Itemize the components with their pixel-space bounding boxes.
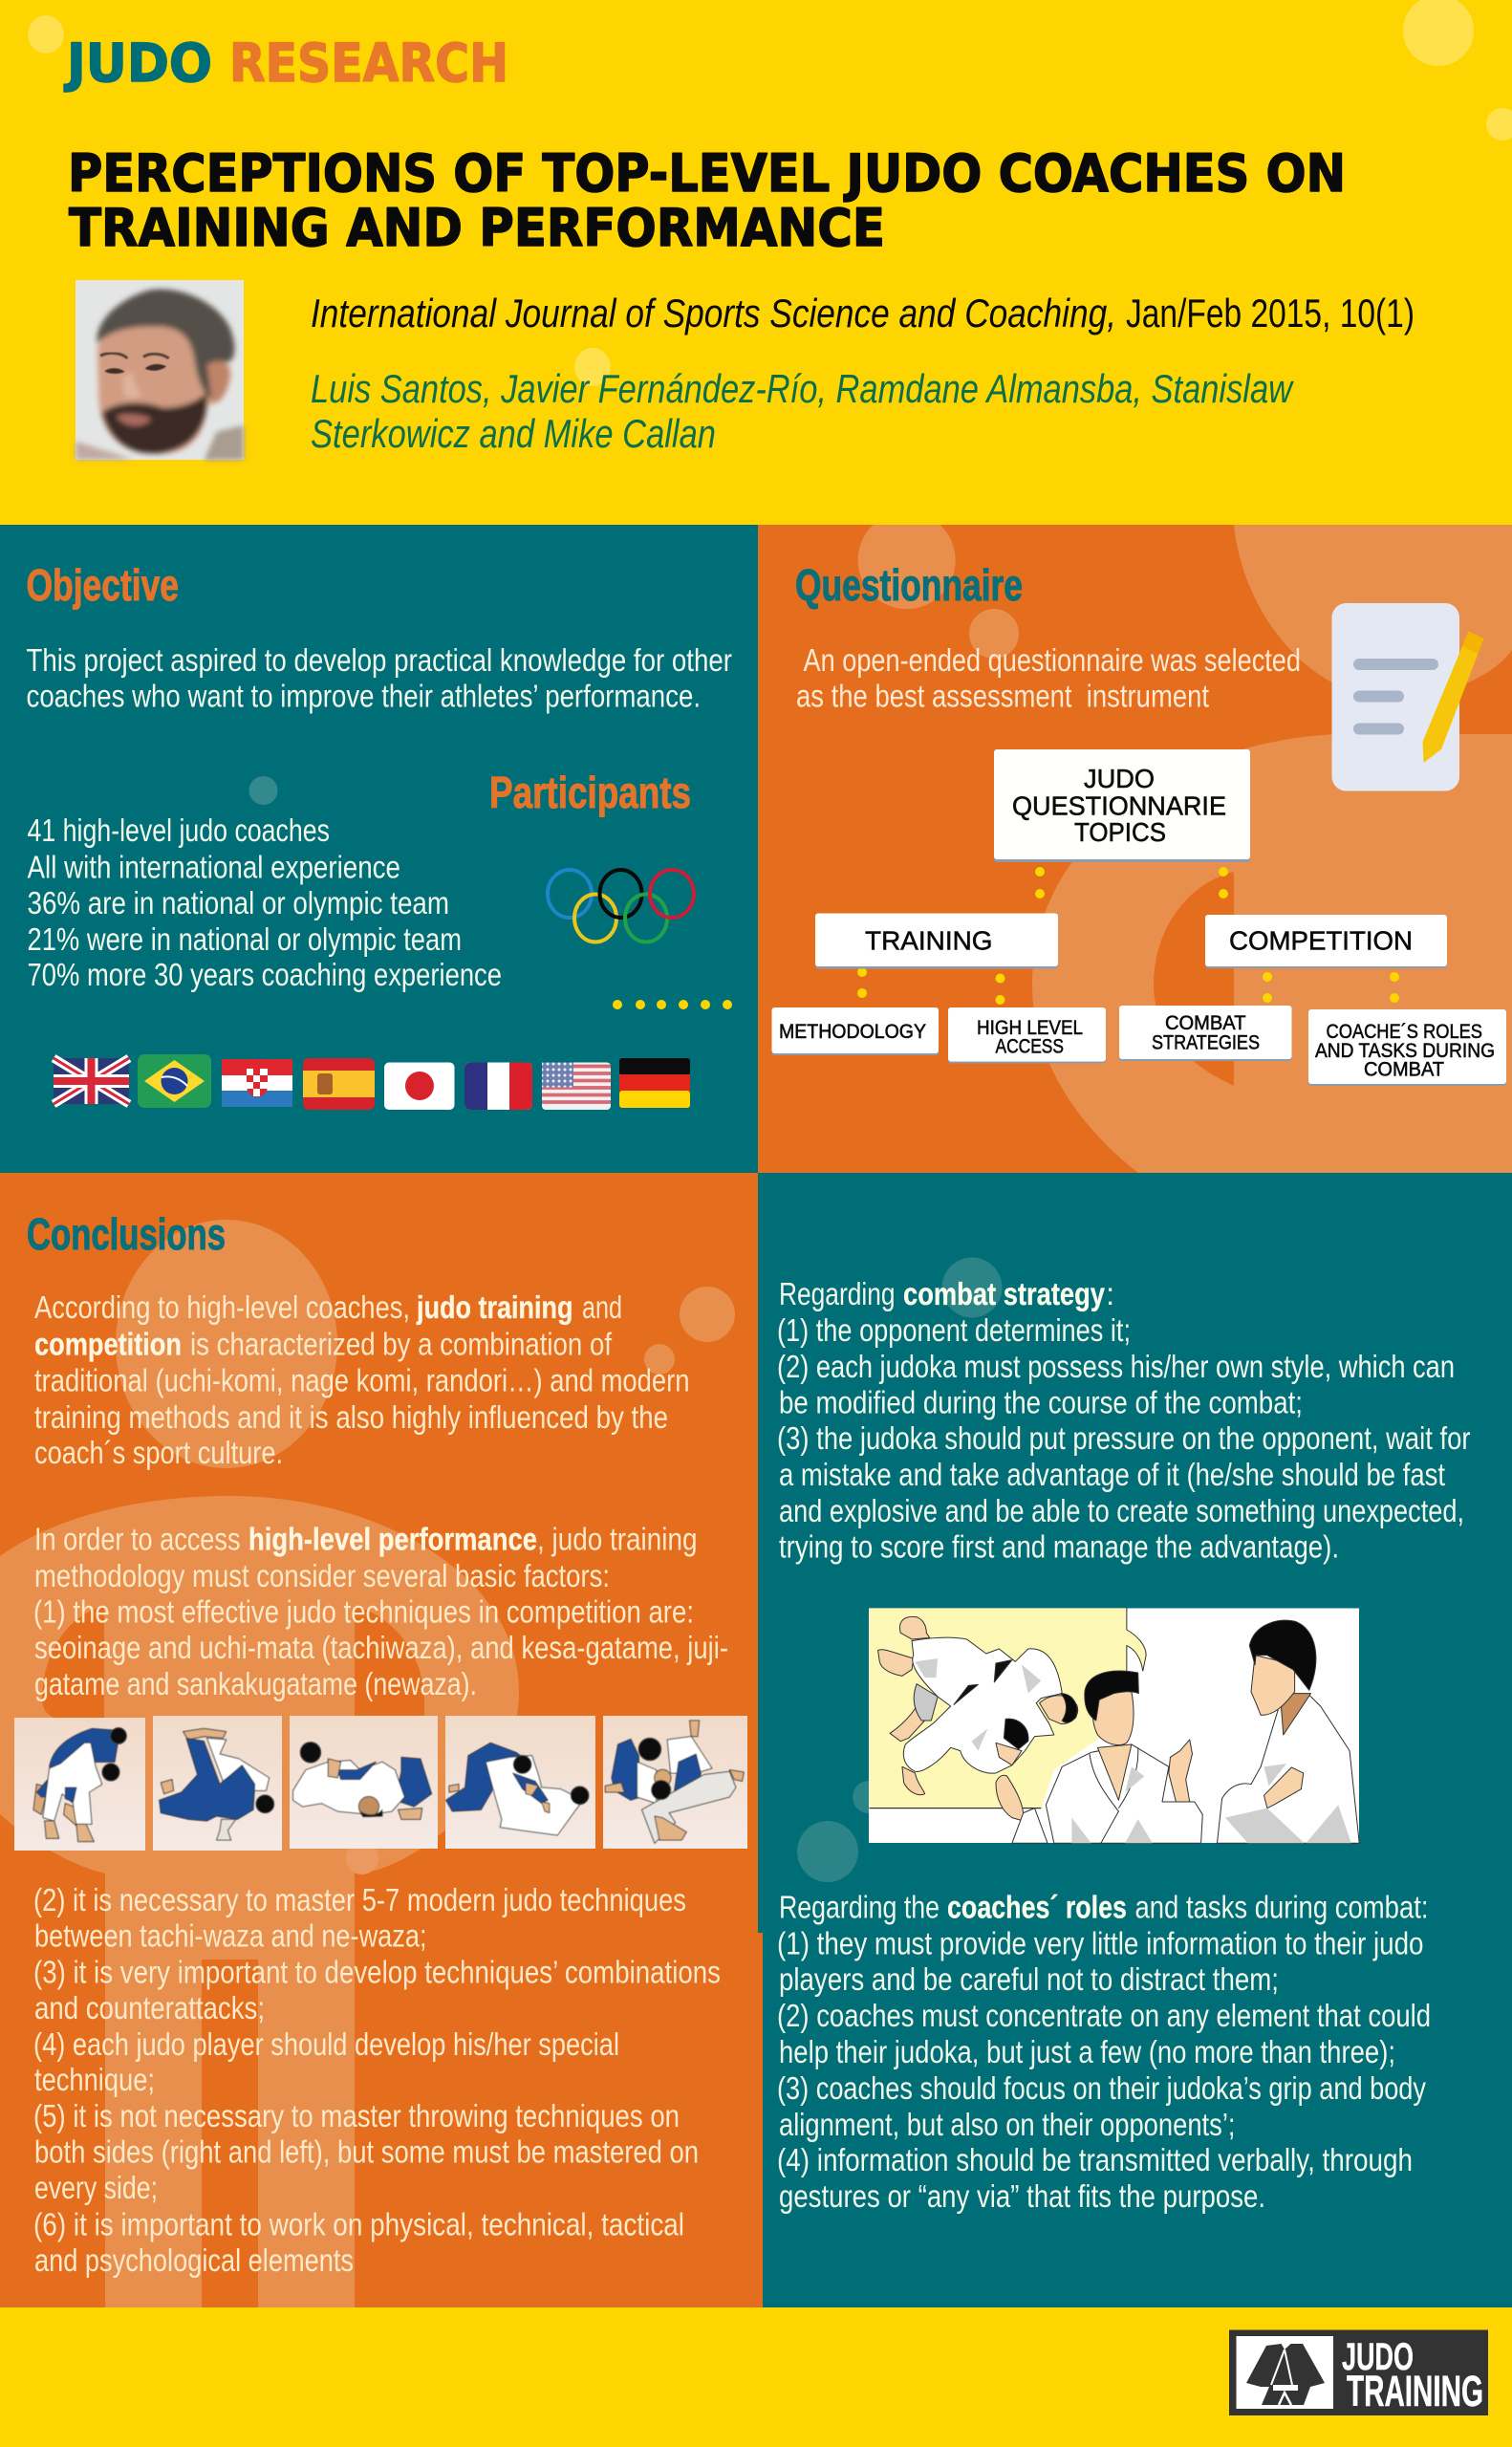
combat strategy text: : — [1106, 1276, 1114, 1311]
questionnaire text: as the best assessment instrument — [796, 679, 1209, 713]
coaches roles text — [777, 1889, 1431, 2214]
panel: header — [0, 0, 1512, 525]
box: competition — [1205, 915, 1447, 968]
box: high level access: HIGH LEVEL — [977, 1017, 1083, 1039]
box: judo questionnarie topics: QUESTIONNARIE — [1012, 791, 1226, 820]
icon: Croatia flag — [222, 1059, 292, 1107]
series label — [63, 32, 508, 94]
box: training: TRAINING — [865, 925, 992, 956]
connector dots — [857, 867, 1399, 1005]
box: high level access — [948, 1007, 1106, 1063]
chart: questionnaire topics tree — [772, 749, 1506, 1086]
icon: olympic rings — [548, 870, 694, 942]
title — [68, 143, 1346, 258]
icon: Japan flag — [384, 1063, 455, 1110]
conclusions list: (2) it is necessary to master 5-7 modern judo techniques — [33, 1882, 686, 1917]
objective text: This project aspired to develop practical knowledge for other — [27, 642, 732, 678]
box: high level access: ACCESS — [996, 1036, 1064, 1057]
conclusions paragraph 2: In order to access — [34, 1522, 241, 1556]
icon: Germany flag — [619, 1058, 690, 1108]
series label: RESEARCH — [229, 32, 508, 94]
coaches roles text: (4) information should be transmitted verbally, through — [777, 2142, 1413, 2177]
conclusions paragraph 1: judo training — [416, 1289, 573, 1325]
conclusions paragraph 2: gatame and sankakugatame (newaza). — [34, 1666, 477, 1701]
icon: UK flag — [54, 1058, 129, 1104]
author photo — [76, 280, 244, 461]
coaches roles text: Regarding the — [779, 1889, 940, 1925]
combat strategy text: Regarding — [779, 1276, 895, 1311]
conclusions list: between tachi-waza and ne-waza; — [34, 1917, 426, 1954]
conclusions list: technique; — [34, 2062, 155, 2097]
coaches roles text: help their judoka, but just a few (no more than three); — [779, 2034, 1395, 2069]
conclusions list — [33, 1882, 721, 2278]
panel: conclusions — [0, 1173, 763, 2307]
combat strategy text: (1) the opponent determines it; — [777, 1312, 1131, 1348]
illustration: judo technique 3 — [290, 1716, 438, 1849]
conclusions paragraph 1: According to high-level coaches, — [34, 1289, 410, 1325]
logo: judo training — [1229, 2330, 1488, 2415]
combat strategy text: trying to score first and manage the advantage). — [779, 1529, 1339, 1564]
box: coaches roles — [1308, 1009, 1506, 1086]
icon: France flag — [464, 1063, 532, 1110]
participants list: All with international experience — [27, 849, 400, 885]
participants list — [27, 812, 502, 992]
heading: objective: Objective — [27, 560, 179, 610]
illustration: judo technique 1 — [14, 1718, 145, 1851]
illustration: judo technique 4 — [445, 1716, 595, 1849]
heading: participants: Participants — [489, 768, 691, 817]
box: combat strategies: STRATEGIES — [1152, 1032, 1260, 1053]
coaches roles text: and tasks during combat: — [1135, 1889, 1428, 1925]
coaches roles text: players and be careful not to distract them; — [779, 1961, 1279, 1997]
title: TRAINING AND PERFORMANCE — [69, 198, 885, 258]
box: methodology: METHODOLOGY — [779, 1021, 926, 1043]
box: judo questionnarie topics: JUDO — [1084, 764, 1155, 793]
conclusions paragraph 1: and — [582, 1289, 622, 1325]
conclusions list: (5) it is not necessary to master throwing techniques on — [33, 2098, 680, 2133]
icon: Spain flag — [303, 1058, 375, 1110]
conclusions list: (6) it is important to work on physical, technical, tactical — [33, 2206, 684, 2242]
box: methodology — [772, 1007, 939, 1055]
authors: Sterkowicz and Mike Callan — [311, 411, 716, 456]
participants list: 36% are in national or olympic team — [27, 885, 449, 920]
box: judo questionnarie topics — [994, 749, 1250, 862]
conclusions paragraph 2: seoinage and uchi-mata (tachiwaza), and kesa-gatame, juji- — [34, 1630, 728, 1665]
box: judo questionnarie topics: TOPICS — [1074, 817, 1166, 847]
combat strategy text: be modified during the course of the combat; — [779, 1384, 1303, 1420]
illustration: coaches watching combat — [869, 1608, 1359, 1843]
icon: USA flag — [542, 1063, 611, 1110]
conclusions paragraph 1: traditional (uchi-komi, nage komi, randori…) and modern — [34, 1363, 690, 1397]
panel: questionnaire — [758, 525, 1512, 1173]
conclusions paragraph 1: training methods and it is also highly influenced by the — [34, 1399, 668, 1435]
journal reference: International Journal of Sports Science and Coaching, — [311, 291, 1116, 336]
coaches roles text: coaches´ roles — [947, 1889, 1127, 1925]
heading: questionnaire: Questionnaire — [795, 560, 1023, 610]
participants list: 41 high-level judo coaches — [27, 812, 330, 848]
conclusions list: both sides (right and left), but some must be mastered on — [34, 2133, 699, 2170]
dotted accent — [613, 1000, 732, 1009]
logo: judo training: JUDO — [1342, 2336, 1414, 2378]
conclusions paragraph 1: competition — [34, 1327, 182, 1361]
conclusions list: every side; — [34, 2170, 158, 2205]
combat strategy text — [777, 1276, 1471, 1564]
heading: conclusions: Conclusions — [27, 1209, 226, 1259]
box: competition: COMPETITION — [1229, 925, 1413, 956]
box: coaches roles: COMBAT — [1364, 1059, 1444, 1080]
coaches roles text: gestures or “any via” that fits the purpose. — [779, 2178, 1265, 2214]
conclusions paragraph 2: high-level performance — [248, 1522, 537, 1556]
series label: JUDO — [63, 32, 212, 94]
conclusions paragraph 2: (1) the most effective judo techniques in competition are: — [33, 1594, 694, 1629]
icon: Brazil flag — [138, 1054, 211, 1108]
authors — [311, 366, 1294, 456]
objective text — [27, 642, 732, 713]
journal reference: Jan/Feb 2015, 10(1) — [1126, 291, 1415, 336]
combat strategy text: combat strategy — [903, 1276, 1106, 1311]
icon: note and pencil — [1332, 603, 1483, 791]
conclusions paragraph 2 — [33, 1522, 728, 1701]
participants list: 70% more 30 years coaching experience — [27, 957, 502, 992]
questionnaire text — [796, 642, 1301, 713]
illustration: judo technique 2 — [153, 1716, 282, 1851]
conclusions paragraph 2: , judo training — [537, 1522, 698, 1556]
box: coaches roles: COACHE´S ROLES — [1327, 1021, 1482, 1043]
box: combat strategies: COMBAT — [1165, 1012, 1246, 1034]
conclusions list: and psychological elements — [34, 2242, 354, 2278]
title: PERCEPTIONS OF TOP-LEVEL JUDO COACHES ON — [68, 143, 1346, 204]
questionnaire text: An open-ended questionnaire was selected — [803, 642, 1301, 678]
illustration: judo technique 5 — [603, 1716, 747, 1849]
box: training — [815, 914, 1058, 969]
coaches roles text: alignment, but also on their opponents’; — [779, 2107, 1235, 2142]
panel: footer — [0, 2307, 1512, 2447]
panel: combat strategy and coaches roles — [758, 1173, 1512, 2307]
box: coaches roles: AND TASKS DURING — [1315, 1040, 1495, 1062]
conclusions list: (3) it is very important to develop techniques’ combinations — [33, 1954, 721, 1990]
panel: objective and participants — [0, 525, 758, 1173]
icon: judogi — [1246, 2344, 1325, 2405]
objective text: coaches who want to improve their athletes’ performance. — [27, 679, 701, 713]
conclusions list: (4) each judo player should develop his/her special — [33, 2026, 619, 2062]
conclusions list: and counterattacks; — [34, 1990, 265, 2025]
conclusions paragraph 1: coach´s sport culture. — [34, 1435, 283, 1470]
box: combat strategies — [1119, 1006, 1292, 1061]
participants list: 21% were in national or olympic team — [27, 921, 462, 957]
authors: Luis Santos, Javier Fernández-Río, Ramdane Almansba, Stanislaw — [311, 366, 1294, 411]
conclusions paragraph 2: methodology must consider several basic factors: — [34, 1558, 610, 1593]
conclusions paragraph 1: is characterized by a combination of — [190, 1327, 613, 1361]
conclusions paragraph 1 — [34, 1289, 690, 1470]
